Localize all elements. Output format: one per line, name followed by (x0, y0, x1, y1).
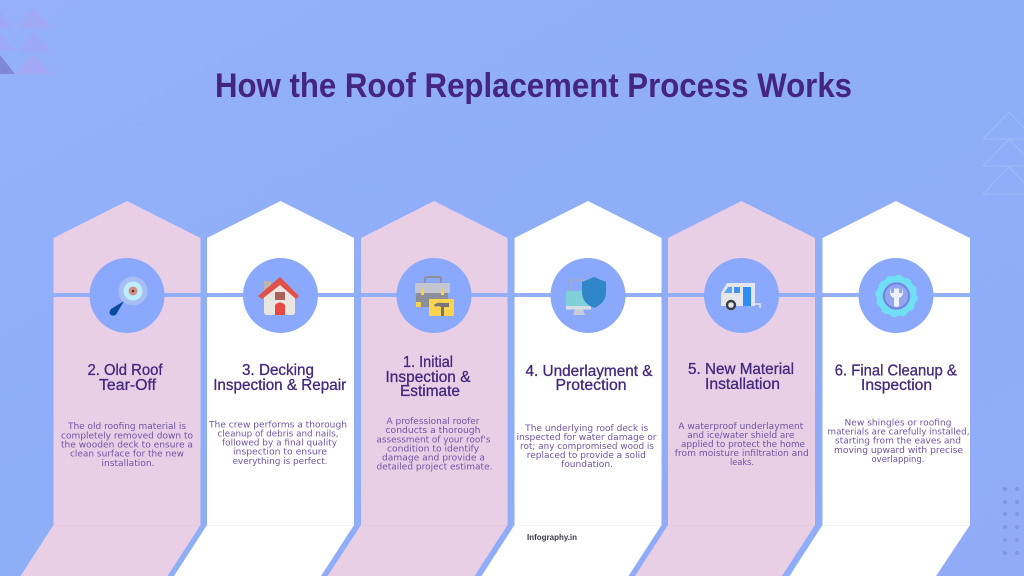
body text: New shingles or roofing (844, 418, 952, 428)
body text: conducts a thorough (386, 426, 480, 436)
body text: overlapping. (872, 455, 924, 465)
body text: clean surface for the new (70, 450, 184, 460)
decoration: right outlined triangles (983, 112, 1024, 194)
panel: 3. Decking Inspection & Repair (174, 201, 354, 576)
heading: Inspection (861, 377, 932, 394)
heading: Protection (556, 377, 626, 394)
icon: magnifying glass (110, 276, 148, 316)
body text: materials are carefully installed, (828, 428, 970, 438)
watermark: Infography.in (527, 533, 577, 542)
body text: leaks. (730, 458, 754, 468)
body text (828, 418, 970, 465)
icon: gear and wrench (877, 276, 916, 316)
body text: applied to protect the home (681, 440, 805, 450)
heading: 5. New Material (688, 361, 794, 378)
icon: trailer (721, 283, 760, 309)
icon: house (258, 277, 299, 315)
body text: A professional roofer (386, 417, 480, 427)
heading (386, 354, 471, 400)
body text: replaced to provide a solid (527, 451, 646, 461)
heading (688, 361, 794, 393)
body text: from moisture infiltration and (675, 449, 809, 459)
body text: and ice/water shield are (687, 431, 794, 441)
decoration: top-left triangles (0, 8, 52, 74)
panel: 2. Old Roof Tear-Off (20, 201, 200, 576)
body text: detailed project estimate. (376, 462, 492, 472)
heading (213, 362, 346, 394)
heading (835, 362, 957, 394)
body text (376, 417, 492, 472)
panel: 1. Initial Inspection & Estimate (328, 201, 508, 576)
body text: the wooden deck to ensure a (61, 440, 193, 450)
panel: 5. New Material Installation (635, 201, 815, 576)
body text: completely removed down to (61, 432, 193, 442)
icon: toolbox (415, 277, 454, 316)
body text: The crew performs a thorough (208, 420, 347, 430)
heading: 4. Underlayment & (526, 363, 653, 380)
body text: starting from the eaves and (835, 436, 961, 446)
heading: Installation (705, 376, 780, 393)
heading: Tear-Off (99, 377, 157, 394)
heading: Estimate (400, 383, 460, 400)
body text: installation. (102, 459, 154, 469)
heading: 1. Initial (403, 354, 453, 371)
body text: The old roofing material is (67, 422, 186, 432)
icon: monitor and shield (566, 277, 606, 315)
body text: condition to identify (387, 444, 479, 454)
body text (516, 424, 657, 470)
heading: Inspection & Repair (213, 377, 346, 394)
body text: foundation. (561, 460, 613, 470)
title: How the Roof Replacement Process Works (215, 67, 852, 105)
body text: inspection to ensure (233, 448, 327, 458)
heading: 3. Decking (242, 362, 314, 379)
body text: The underlying roof deck is (524, 424, 649, 434)
decoration: dot grid (1003, 487, 1019, 555)
heading: 2. Old Roof (88, 362, 163, 379)
body text: followed by a final quality (222, 438, 337, 448)
body text: assessment of your roof's (376, 436, 491, 446)
body text: damage and provide a (382, 454, 485, 464)
body text (61, 422, 193, 469)
body text: inspected for water damage or (516, 433, 657, 443)
heading (88, 362, 163, 394)
heading (526, 363, 653, 394)
heading: 6. Final Cleanup & (835, 362, 957, 380)
body text: everything is perfect. (232, 457, 328, 467)
body text: moving upward with precise (834, 446, 963, 456)
panel: 6. Final Cleanup & Inspection (790, 201, 970, 576)
body text: rot; any compromised wood is (520, 442, 654, 452)
panel: 4. Underlayment & Protection (482, 201, 662, 576)
heading: Inspection & (386, 369, 471, 386)
body text: A waterproof underlayment (678, 422, 804, 432)
body text (208, 420, 347, 467)
body text (675, 422, 809, 468)
body text: cleanup of debris and nails, (218, 430, 338, 440)
